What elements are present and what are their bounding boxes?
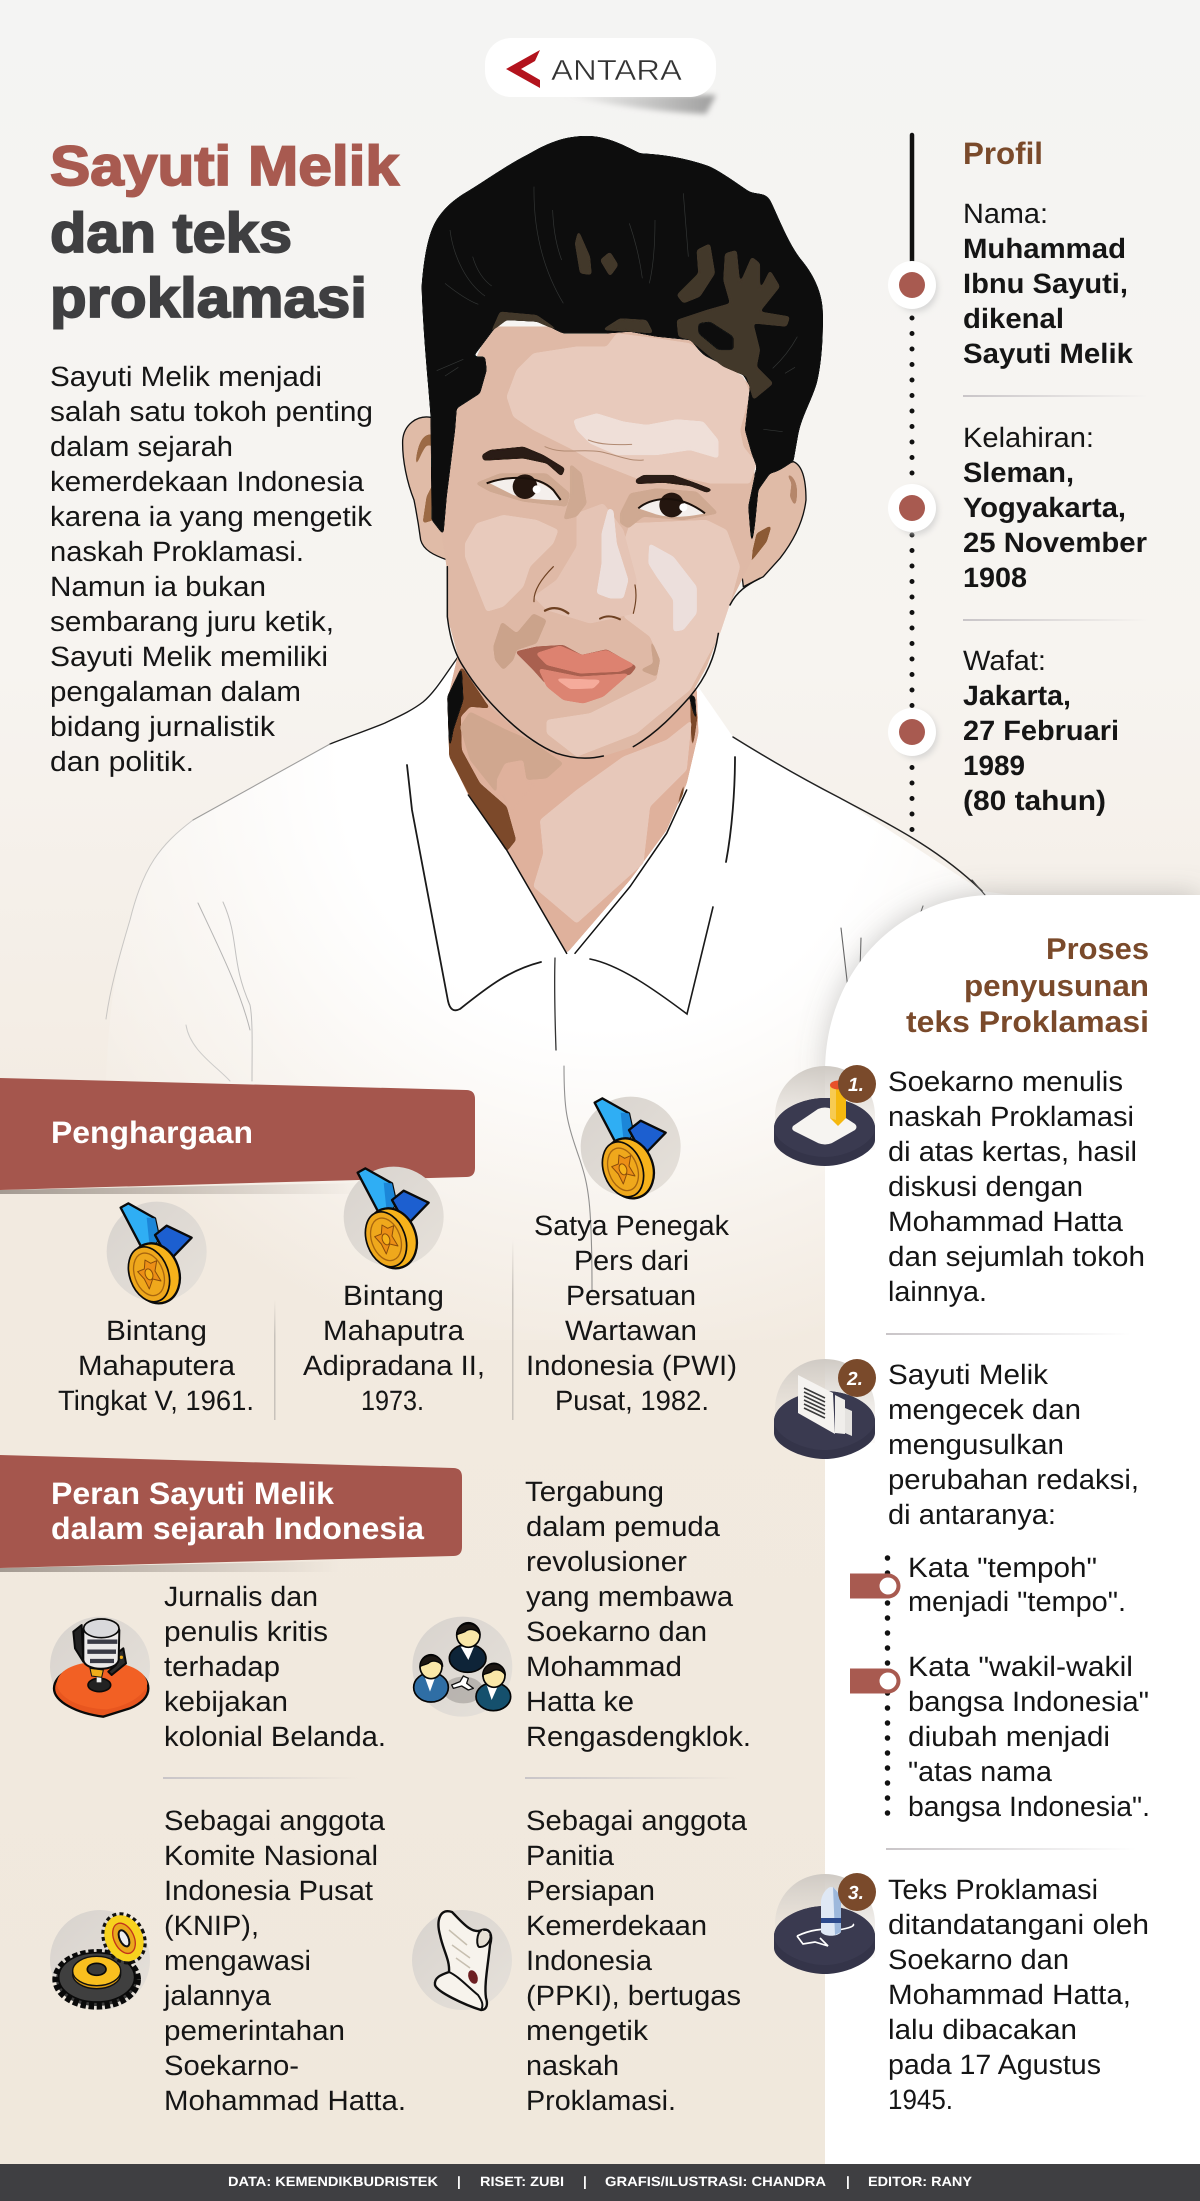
icon: pen and signature: 3. bbox=[848, 1883, 864, 1904]
intro paragraph: sembarang juru ketik, bbox=[50, 606, 334, 637]
profil: nama: dikenal bbox=[963, 303, 1064, 334]
text: Kemerdekaan bbox=[526, 1910, 707, 1941]
text: Mohammad Hatta bbox=[888, 1206, 1123, 1237]
sub-list of edits bbox=[850, 1552, 1150, 1822]
caption: Pusat, 1982. bbox=[555, 1385, 709, 1416]
text: naskah bbox=[526, 2050, 619, 2081]
text bbox=[888, 1066, 1145, 1307]
icon: scroll bbox=[412, 1910, 512, 2010]
icon: pencil on paper: 1. bbox=[848, 1075, 864, 1096]
face lighter tone bbox=[507, 333, 757, 483]
caption: Bintang bbox=[106, 1315, 207, 1346]
text: lalu dibacakan bbox=[888, 2014, 1077, 2045]
award 3 bbox=[526, 1097, 737, 1416]
step 3 bbox=[774, 1873, 1149, 2115]
profil: nama: Muhammad bbox=[963, 233, 1126, 264]
text: lainnya. bbox=[888, 1276, 987, 1307]
step 1 bbox=[774, 1065, 1145, 1307]
profil: nama: Ibnu Sayuti, bbox=[963, 268, 1128, 299]
text: Sebagai anggota bbox=[526, 1805, 747, 1836]
edit 1 text: Kata "tempoh" bbox=[908, 1552, 1097, 1583]
text: mengetik bbox=[526, 2015, 649, 2046]
heading: proses penyusunan bbox=[906, 933, 1149, 1039]
edit 1 text: menjadi "tempo". bbox=[908, 1586, 1126, 1617]
text: dan sejumlah tokoh bbox=[888, 1241, 1145, 1272]
hair bbox=[422, 136, 823, 548]
text: Indonesia Pusat bbox=[164, 1875, 373, 1906]
left ear bbox=[403, 417, 457, 560]
footer credits: EDITOR: RANY bbox=[868, 2174, 972, 2189]
text: Jurnalis dan bbox=[164, 1581, 318, 1612]
tag 1 bbox=[850, 1574, 900, 1598]
footer credits: RISET: ZUBI bbox=[480, 2174, 564, 2189]
caption: Indonesia (PWI) bbox=[526, 1350, 737, 1381]
text: Proklamasi. bbox=[526, 2085, 676, 2116]
edit 2 text: "atas nama bbox=[908, 1756, 1052, 1787]
intro paragraph: bidang jurnalistik bbox=[50, 711, 276, 742]
edit 2 text: Kata "wakil-wakil bbox=[908, 1651, 1133, 1682]
profil: kelahiran: Sleman, bbox=[963, 457, 1074, 488]
text: dalam pemuda bbox=[526, 1511, 720, 1542]
heading: proses penyusunan: penyusunan bbox=[964, 970, 1149, 1003]
text: di antaranya: bbox=[888, 1499, 1056, 1530]
text: Soekarno- bbox=[164, 2050, 299, 2081]
caption: Satya Penegak bbox=[534, 1210, 730, 1241]
text: mengawasi bbox=[164, 1945, 311, 1976]
banner: peran: Peran Sayuti Melik bbox=[51, 1476, 335, 1511]
profil heading: Profil bbox=[963, 136, 1043, 171]
text: di atas kertas, hasil bbox=[888, 1136, 1137, 1167]
edit 1 text bbox=[908, 1552, 1126, 1617]
text: jalannya bbox=[163, 1980, 271, 2011]
intro paragraph: karena ia yang mengetik bbox=[50, 501, 373, 532]
caption: Wartawan bbox=[565, 1315, 697, 1346]
edit 2 text: bangsa Indonesia" bbox=[908, 1686, 1149, 1717]
text: Persiapan bbox=[526, 1875, 655, 1906]
edit 2 text: diubah menjadi bbox=[908, 1721, 1110, 1752]
logo ANTARA: ANTARA bbox=[551, 55, 683, 87]
award 1 bbox=[58, 1202, 254, 1416]
text bbox=[888, 1359, 1139, 1530]
banner: penghargaan bbox=[0, 1078, 475, 1194]
timeline marker: nama bbox=[888, 261, 938, 312]
timeline marker: kelahiran bbox=[888, 484, 938, 535]
text: Soekarno menulis bbox=[888, 1066, 1123, 1097]
left eye and eyebrow bbox=[490, 479, 560, 500]
intro paragraph: dalam sejarah bbox=[50, 431, 233, 462]
text: revolusioner bbox=[526, 1546, 687, 1577]
heading: proses penyusunan: Proses bbox=[1046, 933, 1149, 966]
lips bbox=[515, 645, 637, 703]
text bbox=[163, 1805, 406, 2116]
jaw outline bbox=[447, 567, 760, 758]
hair highlights bbox=[473, 230, 790, 400]
text: Hatta ke bbox=[526, 1686, 634, 1717]
intro paragraph: Sayuti Melik menjadi bbox=[50, 361, 322, 392]
caption: Mahaputera bbox=[78, 1350, 235, 1381]
profil: kelahiran: 25 November bbox=[963, 527, 1147, 558]
caption: Tingkat V, 1961. bbox=[58, 1385, 254, 1416]
profil: nama bbox=[963, 198, 1133, 369]
step 2 bbox=[774, 1359, 1139, 1530]
text: (PPKI), bertugas bbox=[526, 1980, 741, 2011]
icon: medal bbox=[581, 1097, 681, 1205]
text: Mohammad Hatta, bbox=[888, 1979, 1131, 2010]
face shadows bbox=[493, 613, 547, 670]
edit 2 text bbox=[908, 1651, 1150, 1822]
text: pada 17 Agustus bbox=[888, 2049, 1101, 2080]
nose bbox=[534, 440, 643, 619]
caption: Adipradana II, bbox=[303, 1350, 485, 1381]
panel: proses penyusunan background bbox=[825, 895, 1200, 2164]
text bbox=[526, 1805, 747, 2116]
caption: Bintang bbox=[343, 1280, 444, 1311]
heading: proses penyusunan: teks Proklamasi bbox=[906, 1006, 1149, 1039]
profil: wafat: Wafat: bbox=[963, 645, 1046, 676]
caption bbox=[58, 1315, 254, 1416]
text: penulis kritis bbox=[164, 1616, 328, 1647]
right ear bbox=[737, 462, 806, 587]
intro paragraph bbox=[50, 361, 373, 777]
profil: nama: Nama: bbox=[963, 198, 1048, 229]
icon: documents: 2. bbox=[846, 1369, 863, 1390]
caption: Mahaputra bbox=[323, 1315, 464, 1346]
role: jurnalis bbox=[50, 1581, 386, 1752]
footer credits bbox=[0, 2164, 1200, 2201]
text: Indonesia bbox=[526, 1945, 652, 1976]
face highlights bbox=[573, 413, 718, 458]
text: Sebagai anggota bbox=[164, 1805, 385, 1836]
icon: gears bbox=[50, 1909, 151, 2010]
profil: wafat: 1989 bbox=[963, 750, 1025, 781]
profil: wafat: (80 tahun) bbox=[963, 785, 1106, 816]
footer credits: GRAFIS/ILUSTRASI: CHANDRA bbox=[605, 2174, 826, 2189]
text: Teks Proklamasi bbox=[888, 1874, 1098, 1905]
text: naskah Proklamasi bbox=[888, 1101, 1134, 1132]
intro paragraph: salah satu tokoh penting bbox=[50, 396, 373, 427]
footer credits: | bbox=[846, 2174, 850, 2189]
edit 2 text: bangsa Indonesia". bbox=[908, 1791, 1150, 1822]
text: 1945. bbox=[888, 2084, 953, 2115]
profil: wafat: Jakarta, bbox=[963, 680, 1071, 711]
icon: pencil on paper bbox=[774, 1065, 876, 1166]
text: mengecek dan bbox=[888, 1394, 1081, 1425]
text: Panitia bbox=[526, 1840, 614, 1871]
text: kolonial Belanda. bbox=[164, 1721, 386, 1752]
right eye and eyebrow bbox=[638, 499, 705, 517]
text: Tergabung bbox=[525, 1476, 664, 1507]
text: Mohammad Hatta. bbox=[164, 2085, 406, 2116]
icon: documents bbox=[774, 1359, 876, 1459]
banner: peran bbox=[0, 1455, 462, 1572]
title: dan teks bbox=[50, 201, 292, 264]
icon: medal bbox=[344, 1167, 444, 1275]
intro paragraph: Namun ia bukan bbox=[50, 571, 266, 602]
banner: peran: dalam sejarah Indonesia bbox=[51, 1511, 425, 1546]
award 2 bbox=[303, 1167, 485, 1416]
shadow behind process panel bbox=[825, 895, 1200, 1160]
icon: pen and signature bbox=[774, 1873, 876, 1974]
text: (KNIP), bbox=[164, 1910, 259, 1941]
text: pemerintahan bbox=[164, 2015, 345, 2046]
text: diskusi dengan bbox=[888, 1171, 1083, 1202]
intro paragraph: naskah Proklamasi. bbox=[50, 536, 304, 567]
intro paragraph: pengalaman dalam bbox=[50, 676, 301, 707]
text: perubahan redaksi, bbox=[888, 1464, 1139, 1495]
profil: wafat bbox=[963, 645, 1119, 816]
text: mengusulkan bbox=[888, 1429, 1064, 1460]
text bbox=[888, 1874, 1149, 2115]
caption: Persatuan bbox=[566, 1280, 696, 1311]
icon: microphone bbox=[50, 1617, 150, 1717]
icon: medal bbox=[107, 1202, 207, 1310]
profil: nama: Sayuti Melik bbox=[963, 338, 1133, 369]
panel: profil timeline bbox=[888, 135, 1148, 830]
text: Rengasdengklok. bbox=[526, 1721, 751, 1752]
role: pemuda revolusioner bbox=[412, 1476, 751, 1752]
banner: penghargaan: Penghargaan bbox=[51, 1115, 253, 1150]
text bbox=[164, 1581, 386, 1752]
role: PPKI bbox=[412, 1805, 747, 2116]
caption bbox=[303, 1280, 485, 1416]
text: yang membawa bbox=[526, 1581, 733, 1612]
intro paragraph: Sayuti Melik memiliki bbox=[50, 641, 328, 672]
role: KNIP bbox=[50, 1805, 406, 2116]
caption bbox=[526, 1210, 737, 1416]
footer credits: DATA: KEMENDIKBUDRISTEK bbox=[228, 2174, 438, 2189]
text bbox=[525, 1476, 751, 1752]
footer credits: | bbox=[583, 2174, 587, 2189]
title: proklamasi bbox=[50, 266, 367, 329]
text: ditandatangani oleh bbox=[888, 1909, 1149, 1940]
profil: kelahiran: 1908 bbox=[963, 562, 1027, 593]
text: Soekarno dan bbox=[526, 1616, 707, 1647]
intro paragraph: dan politik. bbox=[50, 746, 194, 777]
column dividers bbox=[274, 1300, 276, 1420]
text: Komite Nasional bbox=[164, 1840, 378, 1871]
logo ANTARA bbox=[485, 38, 716, 114]
profil: wafat: 27 Februari bbox=[963, 715, 1119, 746]
footer credits: | bbox=[457, 2174, 461, 2189]
caption: 1973. bbox=[361, 1385, 424, 1416]
intro paragraph: kemerdekaan Indonesia bbox=[50, 466, 364, 497]
text: kebijakan bbox=[164, 1686, 288, 1717]
shirt outlines bbox=[106, 657, 985, 1290]
profil: kelahiran: Yogyakarta, bbox=[963, 492, 1126, 523]
title bbox=[50, 134, 400, 329]
portrait illustration of Sayuti Melik bbox=[100, 136, 1010, 1340]
text: terhadap bbox=[164, 1651, 280, 1682]
face base bbox=[440, 327, 757, 759]
timeline marker: wafat bbox=[888, 708, 938, 759]
tag 2 bbox=[850, 1668, 900, 1694]
profil: kelahiran bbox=[963, 422, 1147, 593]
shirt bbox=[100, 657, 1010, 1340]
caption: Pers dari bbox=[574, 1245, 689, 1276]
icon: three people bbox=[412, 1617, 512, 1717]
profil: kelahiran: Kelahiran: bbox=[963, 422, 1094, 453]
text: Mohammad bbox=[526, 1651, 682, 1682]
text: Sayuti Melik bbox=[888, 1359, 1049, 1390]
neck bbox=[448, 653, 698, 953]
text: Soekarno dan bbox=[888, 1944, 1069, 1975]
neck and head, drawn on a 3x grid bbox=[403, 136, 823, 953]
title: Sayuti Melik bbox=[50, 134, 400, 197]
